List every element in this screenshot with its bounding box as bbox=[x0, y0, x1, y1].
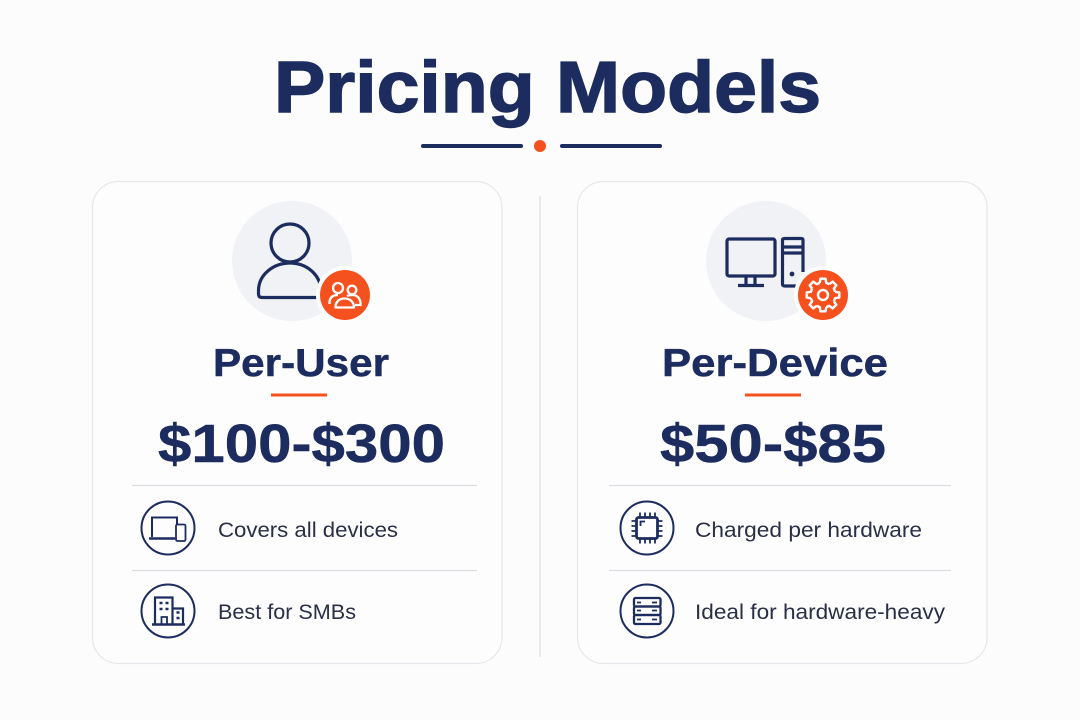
icon: chip bbox=[620, 502, 674, 554]
label: Ideal for hardware-heavy bbox=[695, 601, 946, 624]
row: best for SMBs bbox=[142, 584, 356, 638]
icon: laptop and phone bbox=[142, 502, 194, 554]
panel: per-device bbox=[578, 182, 987, 664]
label: Best for SMBs bbox=[218, 601, 356, 624]
label: Covers all devices bbox=[218, 519, 398, 542]
heading: per-device: Per-Device bbox=[662, 342, 888, 385]
title underline with dot bbox=[423, 140, 660, 152]
panel: per-user bbox=[92, 182, 502, 664]
label: Charged per hardware bbox=[695, 519, 922, 542]
heading: per-user: Per-User bbox=[213, 342, 389, 385]
icon: user with group badge bbox=[232, 201, 374, 324]
heading accent bbox=[271, 394, 327, 396]
icon: server rack bbox=[620, 584, 674, 638]
row: ideal for hardware-heavy bbox=[620, 584, 946, 638]
price: per-device: $50-$85 bbox=[660, 414, 886, 474]
icon: buildings bbox=[142, 584, 194, 638]
icon: computer with gear badge bbox=[706, 201, 852, 324]
row: charged per hardware bbox=[620, 502, 922, 554]
heading accent bbox=[745, 394, 801, 396]
row: covers all devices bbox=[142, 502, 398, 554]
price: per-user: $100-$300 bbox=[158, 414, 445, 474]
title: Pricing Models bbox=[274, 48, 821, 128]
